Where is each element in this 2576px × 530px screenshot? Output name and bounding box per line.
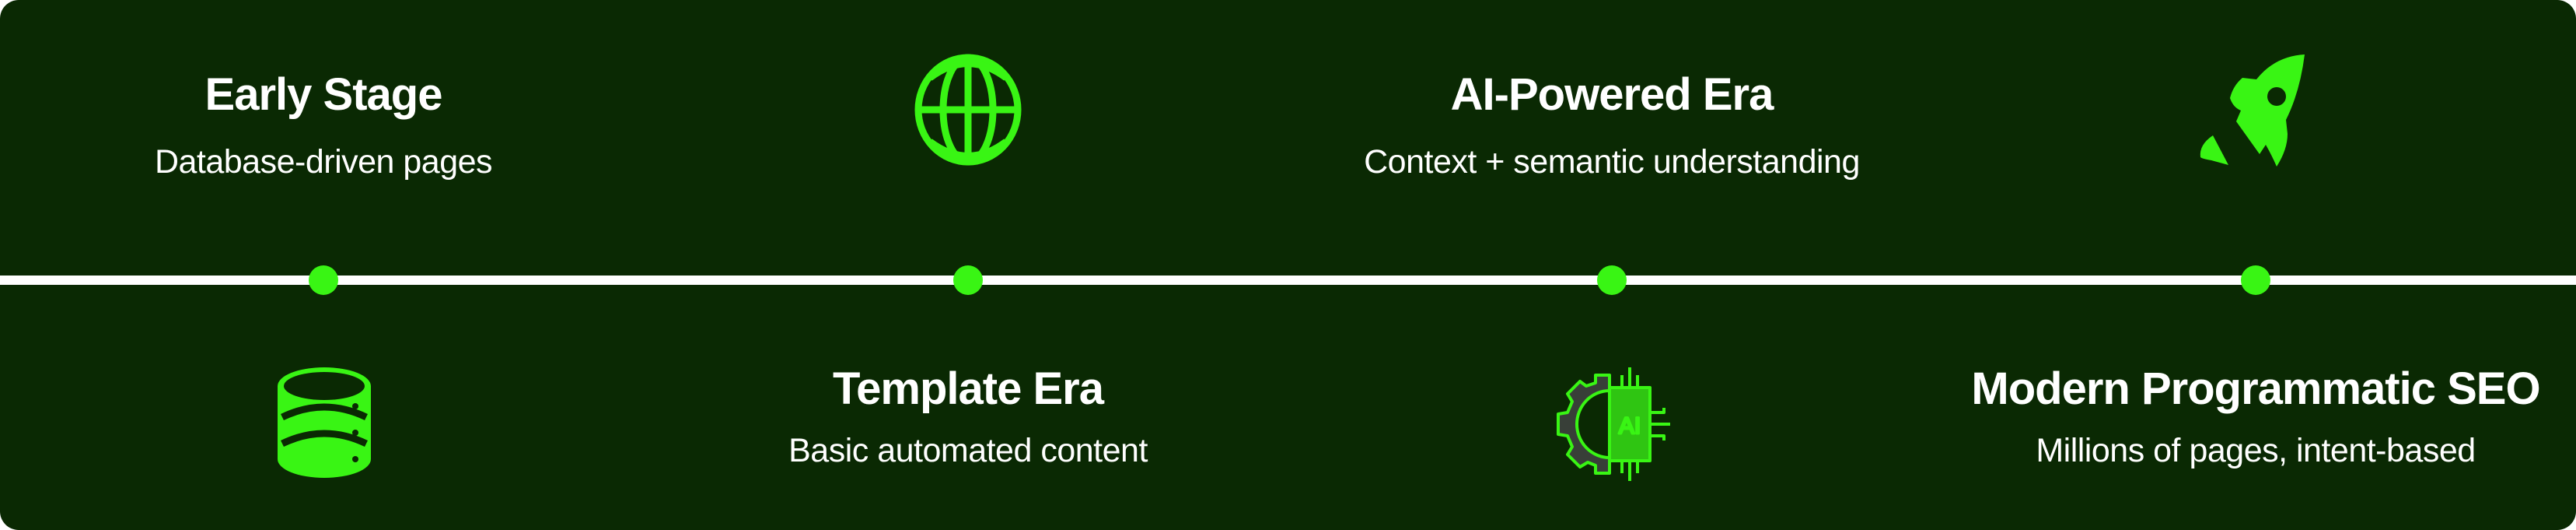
icon: rocket bbox=[2200, 54, 2305, 167]
heading: Template Era: Template Era bbox=[833, 363, 1103, 414]
icon: AI chip gear: AI bbox=[1619, 413, 1641, 439]
dot 1 bbox=[309, 265, 338, 295]
heading: Modern Programmatic SEO: Modern Programmatic SEO bbox=[1971, 363, 2540, 414]
timeline line bbox=[0, 276, 2576, 285]
heading: Early Stage: Early Stage bbox=[205, 69, 442, 120]
dot 3 bbox=[1597, 265, 1627, 295]
dot 2 bbox=[953, 265, 983, 295]
text: Early Stage subtitle: Database-driven pages bbox=[155, 143, 492, 181]
text: AI-Powered subtitle: Context + semantic understanding bbox=[1364, 143, 1860, 181]
icon: database bbox=[278, 367, 371, 478]
icon: AI chip gear bbox=[1557, 367, 1670, 481]
text: Modern subtitle: Millions of pages, intent-based bbox=[2036, 432, 2476, 469]
icon: globe bbox=[914, 54, 1022, 165]
heading: AI-Powered Era: AI-Powered Era bbox=[1451, 69, 1773, 120]
text: Template subtitle: Basic automated content bbox=[788, 432, 1148, 469]
dot 4 bbox=[2241, 265, 2270, 295]
